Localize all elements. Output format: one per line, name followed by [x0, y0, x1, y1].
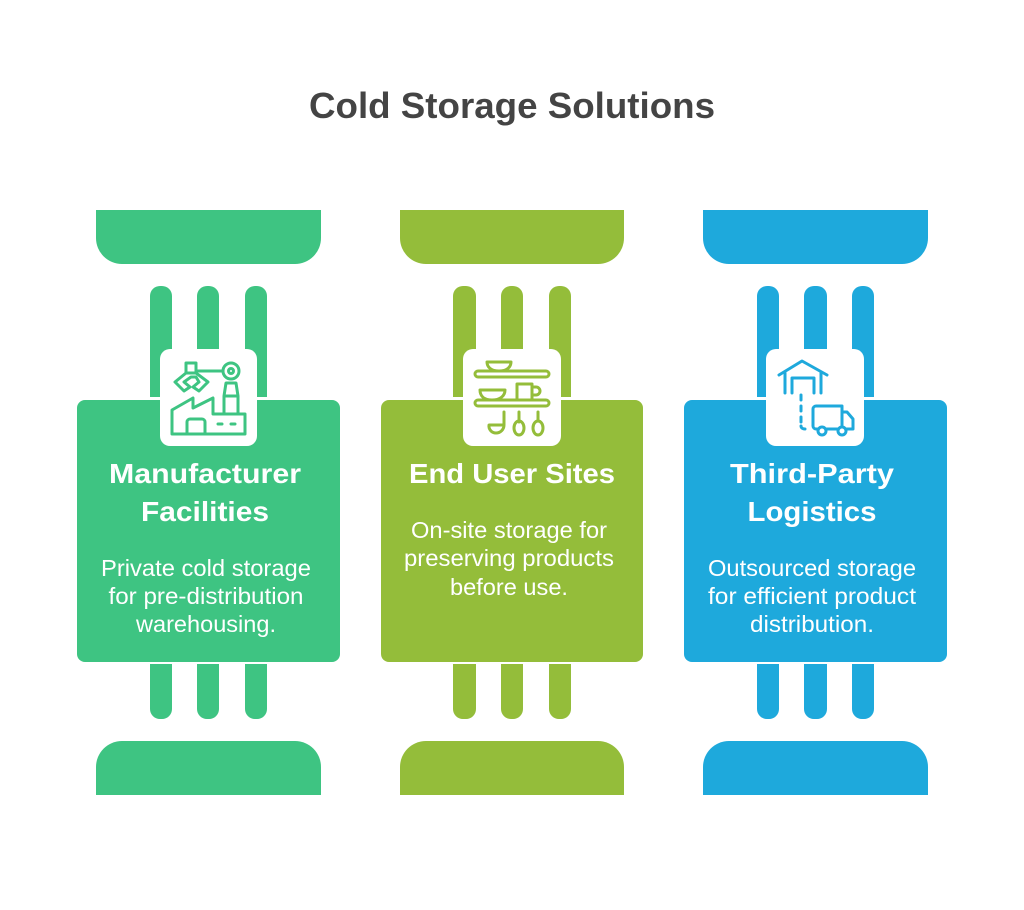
icon: warehouse and truck	[779, 361, 853, 435]
description: Private cold storage	[101, 555, 311, 581]
panel: end user sites	[381, 210, 643, 795]
main card	[684, 400, 947, 662]
panel: end user sites: preserving products	[404, 545, 614, 571]
heading: Third-Party	[730, 458, 894, 489]
title: Cold Storage Solutions	[309, 85, 715, 126]
panel: end user sites: before use.	[450, 574, 568, 600]
icon tile	[766, 349, 864, 446]
upper bars	[150, 286, 267, 397]
panel: third-party logistics: Logistics	[748, 496, 876, 527]
description: Outsourced storage	[708, 555, 916, 581]
heading: End User Sites	[409, 458, 615, 489]
icon: factory with robotic arm	[172, 363, 245, 434]
icon: kitchen shelves	[475, 362, 549, 435]
heading: Manufacturer	[109, 458, 301, 489]
description: On-site storage for	[411, 517, 607, 543]
panel: manufacturer facilities: for pre-distribution	[108, 583, 304, 609]
panel: manufacturer facilities: warehousing.	[135, 611, 276, 637]
top cap	[96, 210, 321, 264]
main card	[77, 400, 340, 662]
panel: manufacturer facilities	[77, 210, 340, 795]
lower bars	[453, 664, 571, 719]
panel: third-party logistics	[684, 210, 947, 795]
upper bars	[453, 286, 571, 397]
main card	[381, 400, 643, 662]
upper bars	[757, 286, 874, 397]
top cap	[703, 210, 928, 264]
lower bars	[757, 664, 874, 719]
lower bars	[150, 664, 267, 719]
bottom cap	[703, 741, 928, 795]
panel: third-party logistics: distribution.	[750, 611, 874, 637]
bottom cap	[96, 741, 321, 795]
top cap	[400, 210, 624, 264]
bottom cap	[400, 741, 624, 795]
panel: third-party logistics: for efficient product	[708, 583, 917, 609]
icon tile	[463, 349, 561, 446]
icon tile	[160, 349, 257, 446]
panel: manufacturer facilities: Facilities	[141, 496, 269, 527]
